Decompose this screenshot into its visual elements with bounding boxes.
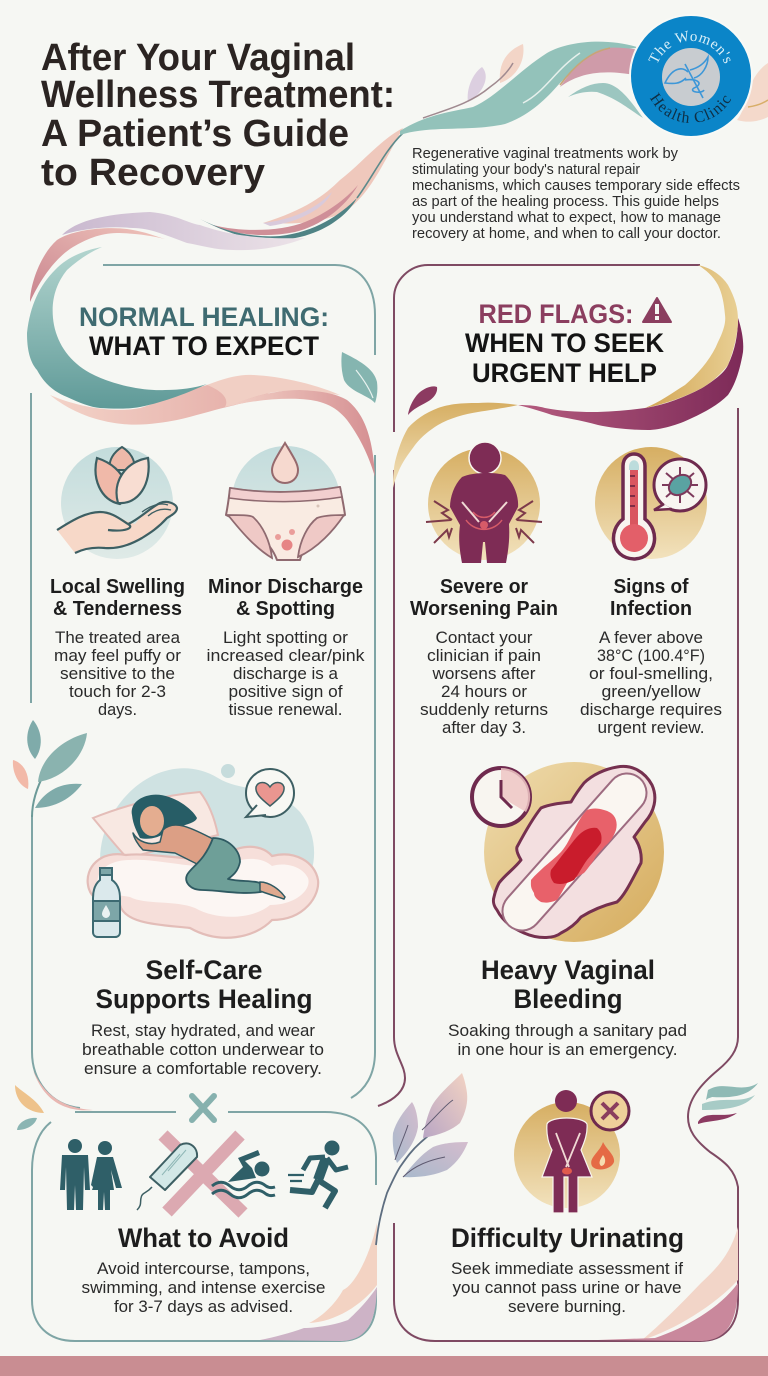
body text: breathable cotton underwear to <box>82 1040 324 1059</box>
body text: swimming, and intense exercise <box>82 1278 326 1297</box>
body text: worsens after <box>431 664 536 683</box>
decorative waves <box>698 1083 758 1124</box>
body text: clinician if pain <box>427 646 541 665</box>
body text <box>82 1259 326 1316</box>
card: self-care <box>82 764 324 1078</box>
body text: sensitive to the <box>60 664 175 683</box>
ribbon: teal swoosh <box>27 247 207 409</box>
heading: URGENT HELP <box>472 358 657 388</box>
card: severe pain <box>410 442 558 737</box>
icon: caduceus <box>665 57 708 98</box>
figure <box>132 795 285 899</box>
panel: red flags <box>378 265 743 1341</box>
body text: 38°C (100.4°F) <box>597 646 705 665</box>
icon: crossed tampon <box>137 1135 243 1213</box>
body text: The treated area <box>55 628 181 647</box>
body text <box>448 1021 687 1059</box>
body text <box>82 1021 324 1078</box>
body text: touch for 2-3 <box>69 682 166 701</box>
card: difficulty urinating <box>451 1090 684 1316</box>
card: signs of infection <box>580 447 722 737</box>
title: After Your Vaginal <box>41 37 355 79</box>
decorative centre plant <box>376 1073 468 1245</box>
icon: couple <box>60 1139 122 1210</box>
footer bar <box>0 1356 768 1376</box>
panel outline <box>378 265 738 1341</box>
logo: The Women's Health Clinic: The Women's <box>648 30 731 64</box>
icon: water bottle <box>93 868 120 937</box>
intro paragraph: stimulating your body's natural repair <box>412 161 640 178</box>
body text: suddenly returns <box>420 700 548 719</box>
ribbon: bottom corner of upper panel <box>33 1070 93 1110</box>
panel: normal healing <box>13 247 377 1108</box>
body text: Rest, stay hydrated, and wear <box>91 1021 315 1040</box>
heading: Signs of <box>614 576 689 598</box>
title: Wellness Treatment: <box>41 74 395 116</box>
body text <box>54 628 181 719</box>
decorative plant <box>13 720 87 817</box>
decorative leaves <box>15 1085 44 1130</box>
body text: Contact your <box>436 628 533 647</box>
heading <box>79 302 329 361</box>
title: to Recovery <box>41 152 265 194</box>
icon: abdominal pain figure <box>426 442 542 563</box>
body text: may feel puffy or <box>54 646 181 665</box>
body text <box>420 628 548 737</box>
body text: urgent review. <box>598 718 704 737</box>
card: signs of infection: Infection <box>610 598 692 620</box>
intro paragraph: as part of the healing process. This guide helps <box>412 193 719 210</box>
intro paragraph: Regenerative vaginal treatments work by <box>412 145 678 162</box>
icon: heart speech bubble <box>246 769 294 817</box>
card: heavy bleeding <box>448 762 687 1059</box>
icon: thermometer and germ <box>595 447 707 559</box>
icon: warning triangle <box>643 298 671 322</box>
card: local swelling <box>50 447 185 719</box>
body text: discharge is a <box>233 664 339 683</box>
body text: for 3-7 days as advised. <box>114 1297 293 1316</box>
illustration: resting woman <box>88 764 318 938</box>
body text: tissue renewal. <box>228 700 342 719</box>
card: heavy bleeding: Bleeding <box>514 984 622 1014</box>
heading: Heavy Vaginal <box>481 955 655 985</box>
intro paragraph: recovery at home, and when to call your doctor. <box>412 225 721 242</box>
corner ribbon <box>260 1223 377 1341</box>
heading: NORMAL HEALING: <box>79 302 329 332</box>
body text: green/yellow <box>602 682 701 701</box>
intro paragraph <box>412 145 740 242</box>
ribbon: upper gold <box>645 265 738 408</box>
icon: hand and lotus <box>57 447 177 559</box>
body text: ensure a comfortable recovery. <box>84 1059 322 1078</box>
body text: severe burning. <box>508 1297 626 1316</box>
body text: Soaking through a sanitary pad <box>448 1021 687 1040</box>
panel outline <box>31 265 375 1108</box>
ribbon: drop <box>408 386 437 415</box>
logo: The Women's Health Clinic <box>629 16 753 136</box>
icon: sanitary pad and clock <box>472 762 664 942</box>
body text <box>451 1259 683 1316</box>
heading: What to Avoid <box>118 1223 289 1253</box>
icon: cross mark <box>192 1096 214 1120</box>
card: self-care: Supports Healing <box>96 984 312 1014</box>
body text: Seek immediate assessment if <box>451 1259 683 1278</box>
body text: 24 hours or <box>441 682 527 701</box>
body text <box>206 628 365 719</box>
body text: or foul-smelling, <box>589 664 713 683</box>
heading: Severe or <box>440 576 528 598</box>
heading <box>465 298 671 388</box>
heading: Difficulty Urinating <box>451 1223 684 1253</box>
icon: standing figure <box>514 1090 629 1213</box>
card: local swelling: & Tenderness <box>53 598 182 620</box>
heading: Self-Care <box>146 955 262 985</box>
heading: WHAT TO EXPECT <box>89 331 319 361</box>
icon: swimmer <box>212 1150 275 1198</box>
body text <box>580 628 722 737</box>
heading: Minor Discharge <box>208 576 363 598</box>
body text: increased clear/pink <box>206 646 365 665</box>
body text: A fever above <box>599 628 703 647</box>
card: severe pain: Worsening Pain <box>410 598 558 620</box>
intro paragraph: mechanisms, which causes temporary side effects <box>412 177 740 194</box>
icon: runner <box>288 1140 348 1208</box>
top flowing ribbon <box>30 42 768 302</box>
body text: in one hour is an emergency. <box>458 1040 678 1059</box>
body text: days. <box>98 700 137 719</box>
panel outline <box>32 1112 376 1341</box>
ribbon: magenta <box>518 318 743 430</box>
icon: underwear and drop <box>226 443 345 560</box>
body text: after day 3. <box>442 718 526 737</box>
corner ribbon <box>598 1227 738 1341</box>
leaf <box>341 352 377 403</box>
intro paragraph: you understand what to expect, how to manage <box>412 209 721 226</box>
card: minor discharge: & Spotting <box>236 598 335 620</box>
body text: Light spotting or <box>223 628 348 647</box>
heading: RED FLAGS: <box>478 299 634 329</box>
ribbon: lower gold <box>393 403 518 488</box>
body text: positive sign of <box>228 682 343 701</box>
icon: prohibited activities <box>60 1135 348 1213</box>
body text: you cannot pass urine or have <box>452 1278 682 1297</box>
body text: discharge requires <box>580 700 722 719</box>
title: A Patient’s Guide <box>41 113 349 155</box>
panel: what to avoid <box>32 1070 377 1341</box>
ribbon: pink swoosh <box>50 384 283 425</box>
body text: Avoid intercourse, tampons, <box>97 1259 310 1278</box>
logo: The Women's Health Clinic: Health Clinic <box>650 92 731 123</box>
title <box>41 37 395 194</box>
heading: WHEN TO SEEK <box>465 328 664 358</box>
card: minor discharge <box>206 443 365 719</box>
heading: Local Swelling <box>50 576 185 598</box>
